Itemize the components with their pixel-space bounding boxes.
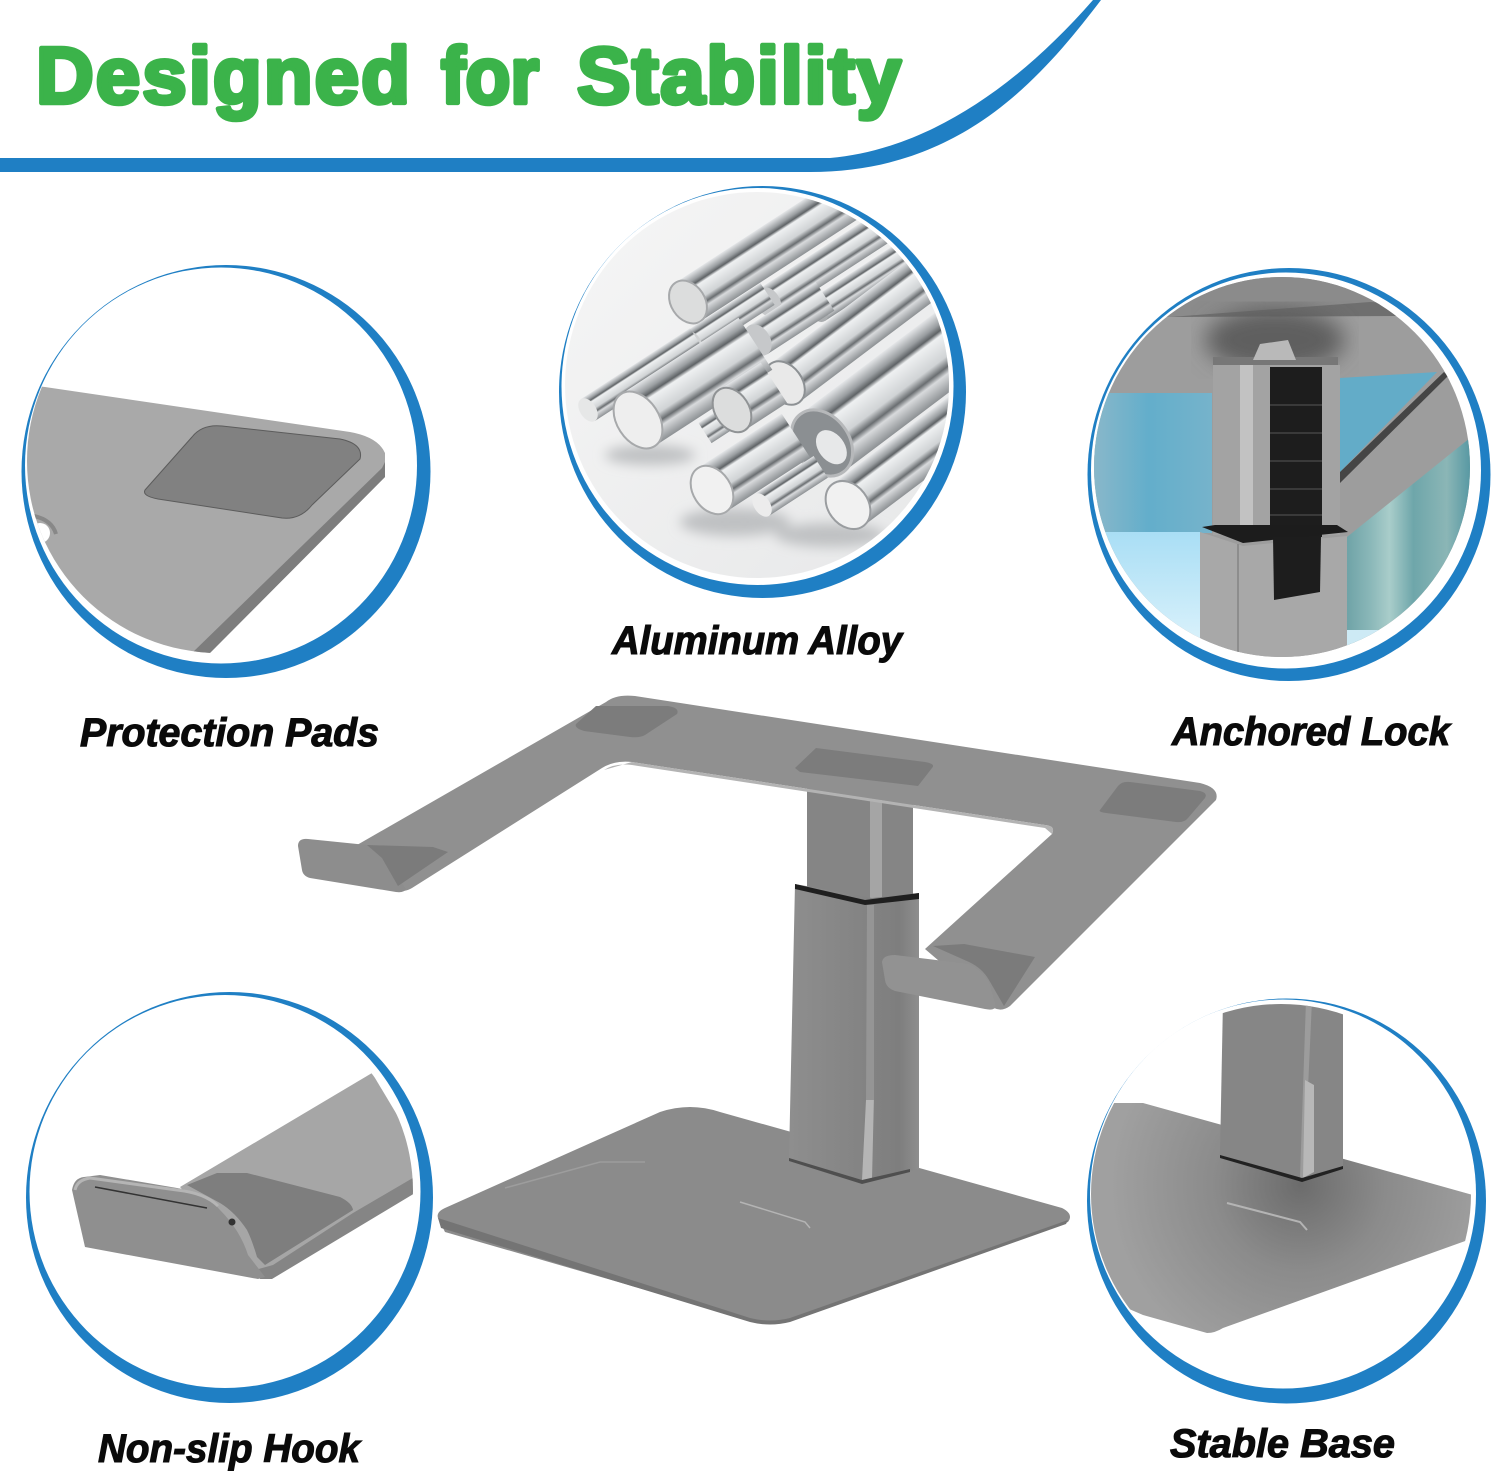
title word: Designed: Designed	[36, 31, 410, 120]
circle ring	[1088, 268, 1490, 681]
label: aluminum alloy: Aluminum Alloy	[611, 619, 904, 663]
circle ring	[559, 186, 966, 598]
right hook	[882, 955, 996, 1010]
panel: stable base	[1085, 998, 1486, 1404]
circle ring	[1087, 998, 1486, 1404]
title word: for: for	[441, 31, 539, 120]
circle ring	[26, 992, 433, 1403]
photo: hook close-up	[72, 1073, 430, 1279]
laptop stand	[298, 696, 1217, 1324]
photo: aluminum rods	[565, 192, 949, 578]
plate pads	[576, 706, 678, 737]
circle ring	[22, 265, 430, 678]
panel: aluminum alloy	[559, 186, 966, 598]
stand top plate	[357, 696, 1217, 1010]
title word: Stability: Stability	[577, 31, 902, 120]
panel: protection pads	[0, 265, 430, 678]
panel: non-slip hook	[26, 992, 433, 1403]
title	[36, 31, 902, 120]
stand base	[438, 1107, 1070, 1323]
photo: base and column	[1085, 1000, 1473, 1333]
header curve	[0, 0, 1101, 172]
label: stable base: Stable Base	[1170, 1422, 1395, 1466]
photo: plate corner with pad	[0, 382, 385, 655]
label: non-slip hook: Non-slip Hook	[98, 1427, 362, 1471]
panel: anchored lock	[1085, 268, 1500, 681]
photo: column with black lock strip	[1094, 277, 1470, 657]
label: anchored lock: Anchored Lock	[1171, 710, 1452, 754]
label: protection pads: Protection Pads	[80, 711, 379, 755]
left hook	[298, 839, 406, 892]
stand column	[807, 785, 913, 905]
